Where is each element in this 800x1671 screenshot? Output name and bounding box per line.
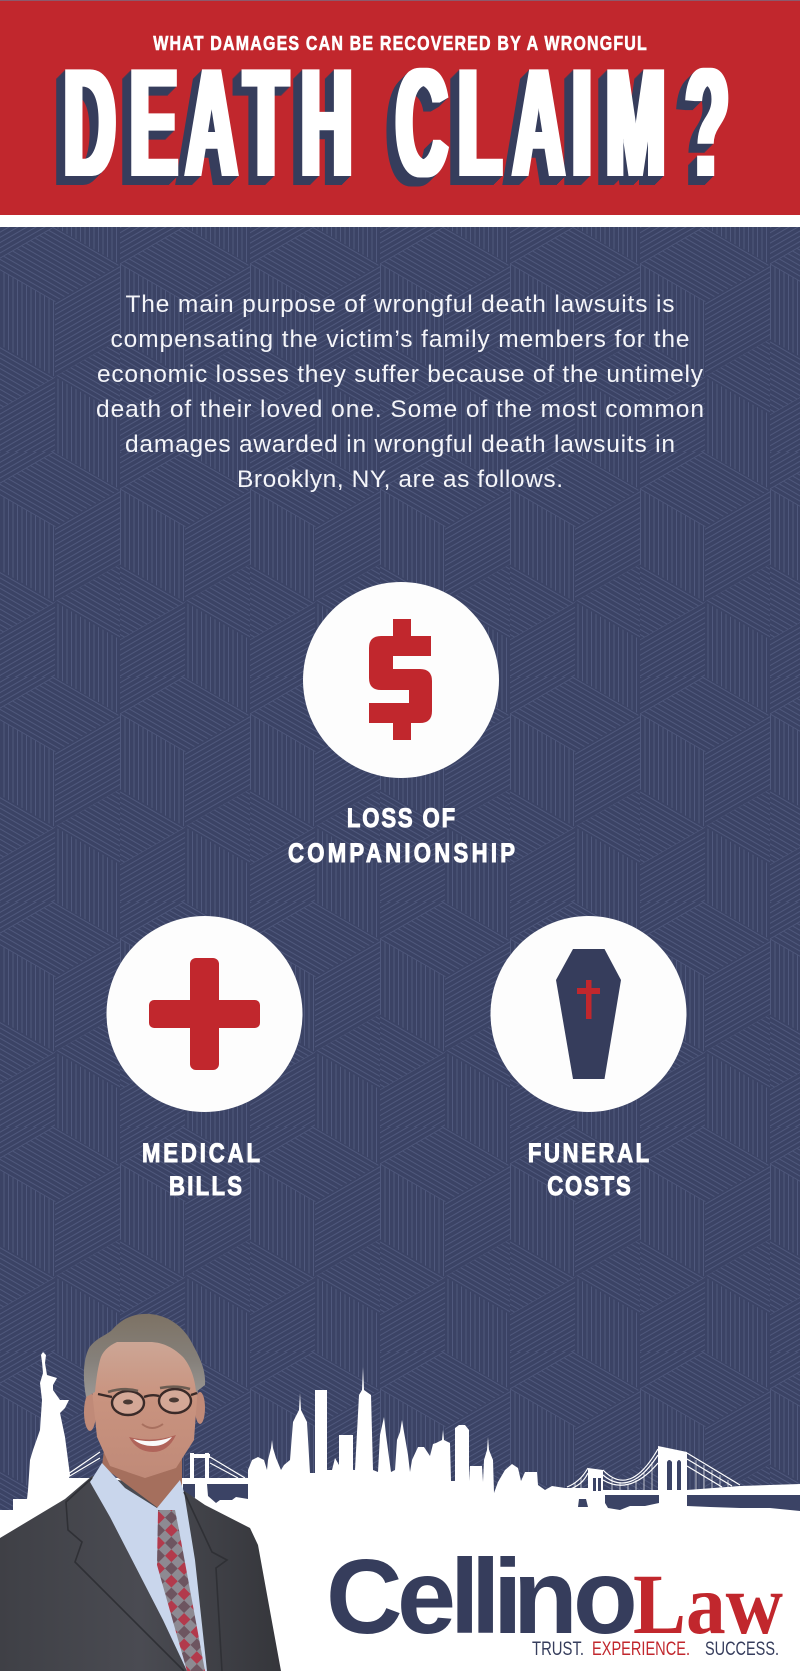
suspension cables <box>68 1449 740 1490</box>
portrait of attorney <box>0 1314 281 1671</box>
eyebrows <box>108 1387 190 1392</box>
label: FUNERAL <box>528 1139 649 1169</box>
item: loss of companionship <box>288 582 515 869</box>
icon: coffin <box>490 916 686 1112</box>
tagline: TRUST. <box>532 1639 584 1660</box>
tie <box>157 1510 205 1671</box>
white divider band <box>0 215 800 227</box>
label: MEDICAL <box>142 1139 260 1169</box>
lapels <box>66 1478 227 1671</box>
label <box>288 804 515 869</box>
intro paragraph: The main purpose of wrongful death lawsuits is <box>126 291 674 318</box>
nose shadow <box>142 1424 163 1428</box>
intro paragraph: compensating the victim’s family members for the <box>110 326 690 353</box>
label: BILLS <box>169 1172 242 1202</box>
label <box>528 1139 649 1202</box>
face <box>92 1332 198 1478</box>
intro paragraph: damages awarded in wrongful death lawsuits in <box>125 431 675 458</box>
tagline: SUCCESS. <box>705 1639 779 1660</box>
city skyline silhouette <box>0 1352 800 1671</box>
hair <box>84 1314 205 1397</box>
wordmark: Cellino: Cellino <box>326 1538 638 1656</box>
shirt <box>90 1463 207 1671</box>
item: funeral costs <box>490 916 686 1202</box>
intro paragraph <box>96 291 704 493</box>
item: medical bills <box>106 916 302 1202</box>
title: DEATH CLAIM? <box>64 36 729 209</box>
tagline: EXPERIENCE. <box>592 1639 690 1660</box>
header banner <box>0 0 800 215</box>
smile <box>129 1435 176 1452</box>
patterned navy background panel <box>0 227 800 1527</box>
wordmark: Law: Law <box>633 1556 783 1652</box>
eyes <box>123 1398 179 1404</box>
jacket <box>0 1476 281 1671</box>
glasses <box>98 1389 197 1415</box>
tagline <box>532 1639 779 1660</box>
label: LOSS OF <box>347 804 455 834</box>
intro paragraph: death of their loved one. Some of the most common <box>96 396 704 423</box>
subtitle: WHAT DAMAGES CAN BE RECOVERED BY A WRONGFUL <box>153 32 647 54</box>
intro paragraph: economic losses they suffer because of the untimely <box>97 361 704 388</box>
label: COMPANIONSHIP <box>288 839 515 869</box>
intro paragraph: Brooklyn, NY, are as follows. <box>237 466 563 493</box>
icon: dollar sign <box>303 582 499 778</box>
label <box>142 1139 260 1202</box>
neck <box>102 1450 182 1508</box>
logo <box>326 1538 783 1660</box>
icon: medical cross <box>106 916 302 1112</box>
ears <box>84 1393 96 1431</box>
label: COSTS <box>547 1172 631 1202</box>
navy gaps under bridge decks and in towers <box>183 1460 800 1511</box>
